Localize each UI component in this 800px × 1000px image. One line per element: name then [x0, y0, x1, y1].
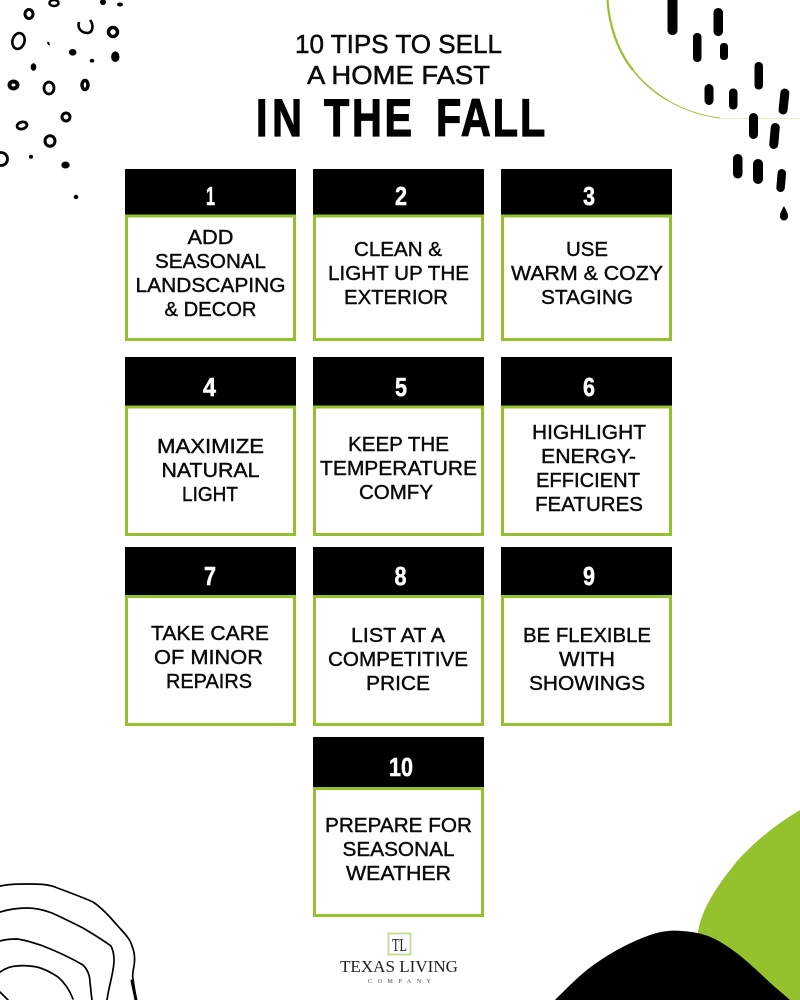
tip card 2: 2 — [395, 181, 407, 211]
title: 10 TIPS TO SELL — [295, 31, 502, 59]
decoration: bottom-right green blob — [690, 810, 800, 1000]
tip card 10: SEASONAL — [342, 839, 454, 861]
tip card 9: BE FLEXIBLE — [523, 625, 651, 647]
tip card 3 — [501, 169, 672, 340]
tip card 5: TEMPERATURE — [320, 458, 477, 480]
tip card 7: 7 — [204, 561, 216, 591]
tip card 5: 5 — [395, 372, 407, 402]
tip card 4: LIGHT — [182, 484, 238, 506]
tip card 7 — [125, 547, 296, 724]
title: A HOME FAST — [307, 62, 490, 90]
tip card 3: 3 — [583, 181, 595, 211]
tip card 3: WARM & COZY — [511, 263, 663, 285]
decoration: top-left dots and rings — [0, 0, 123, 199]
title: FALL — [436, 89, 545, 148]
decoration: top-right green arc — [608, 0, 800, 118]
logo: Texas Living Company: COMPANY — [368, 979, 432, 985]
tip card 6: HIGHLIGHT — [532, 422, 646, 444]
tip card 6 — [501, 357, 672, 534]
tip card 5: KEEP THE — [348, 434, 449, 456]
tip card 6: FEATURES — [535, 494, 643, 516]
tip card 4: 4 — [203, 372, 216, 402]
tip card 2: CLEAN & — [354, 239, 443, 261]
tip card 9: WITH — [559, 649, 615, 671]
tip card 8: PRICE — [366, 673, 430, 695]
decoration: bottom-right black hill — [555, 931, 790, 1000]
tip card 10: WEATHER — [346, 863, 451, 885]
decoration: bottom-left contour lines — [0, 884, 136, 1000]
tip card 1: ADD — [188, 227, 234, 249]
tip card 8: 8 — [394, 561, 406, 591]
tip card 7: REPAIRS — [166, 671, 252, 693]
tip card 10: 10 — [389, 752, 413, 782]
tip card 8 — [313, 547, 484, 724]
tip card 5 — [313, 357, 484, 534]
tip card 10 — [313, 737, 484, 916]
tip card 7: OF MINOR — [154, 647, 263, 669]
tip card 4 — [125, 357, 296, 534]
tip card 5: COMFY — [359, 482, 433, 504]
tip card 7: TAKE CARE — [151, 623, 269, 645]
tip card 2: EXTERIOR — [344, 287, 448, 309]
tip card 9 — [501, 547, 672, 724]
logo: Texas Living Company — [340, 934, 458, 985]
title: THE — [324, 89, 412, 148]
tip card 8: COMPETITIVE — [328, 649, 468, 671]
tip card 1 — [125, 169, 296, 340]
tip card 2 — [313, 169, 484, 340]
tip card 1: 1 — [206, 181, 215, 211]
tip card 6: EFFICIENT — [536, 470, 640, 492]
tip card 8: LIST AT A — [351, 625, 446, 647]
tip card 10: PREPARE FOR — [325, 815, 472, 837]
tip card 3: STAGING — [541, 287, 633, 309]
tip card 9: 9 — [583, 561, 595, 591]
tip card 4: MAXIMIZE — [157, 436, 264, 458]
tip card 9: SHOWINGS — [529, 673, 645, 695]
tip card 3: USE — [566, 239, 608, 261]
tip card 6: ENERGY- — [541, 446, 636, 468]
title: IN — [256, 89, 302, 148]
tip card 1: LANDSCAPING — [136, 275, 286, 297]
tip card 6: 6 — [583, 372, 595, 402]
tip card 2: LIGHT UP THE — [328, 263, 469, 285]
tip card 1: SEASONAL — [155, 251, 266, 273]
logo: Texas Living Company: TL — [392, 935, 407, 955]
tip card 4: NATURAL — [162, 460, 260, 482]
decoration: top-right black brush strokes — [668, 0, 790, 220]
tip card 1: & DECOR — [164, 299, 256, 321]
title — [256, 31, 545, 148]
logo: Texas Living Company: TEXAS LIVING — [340, 957, 458, 976]
